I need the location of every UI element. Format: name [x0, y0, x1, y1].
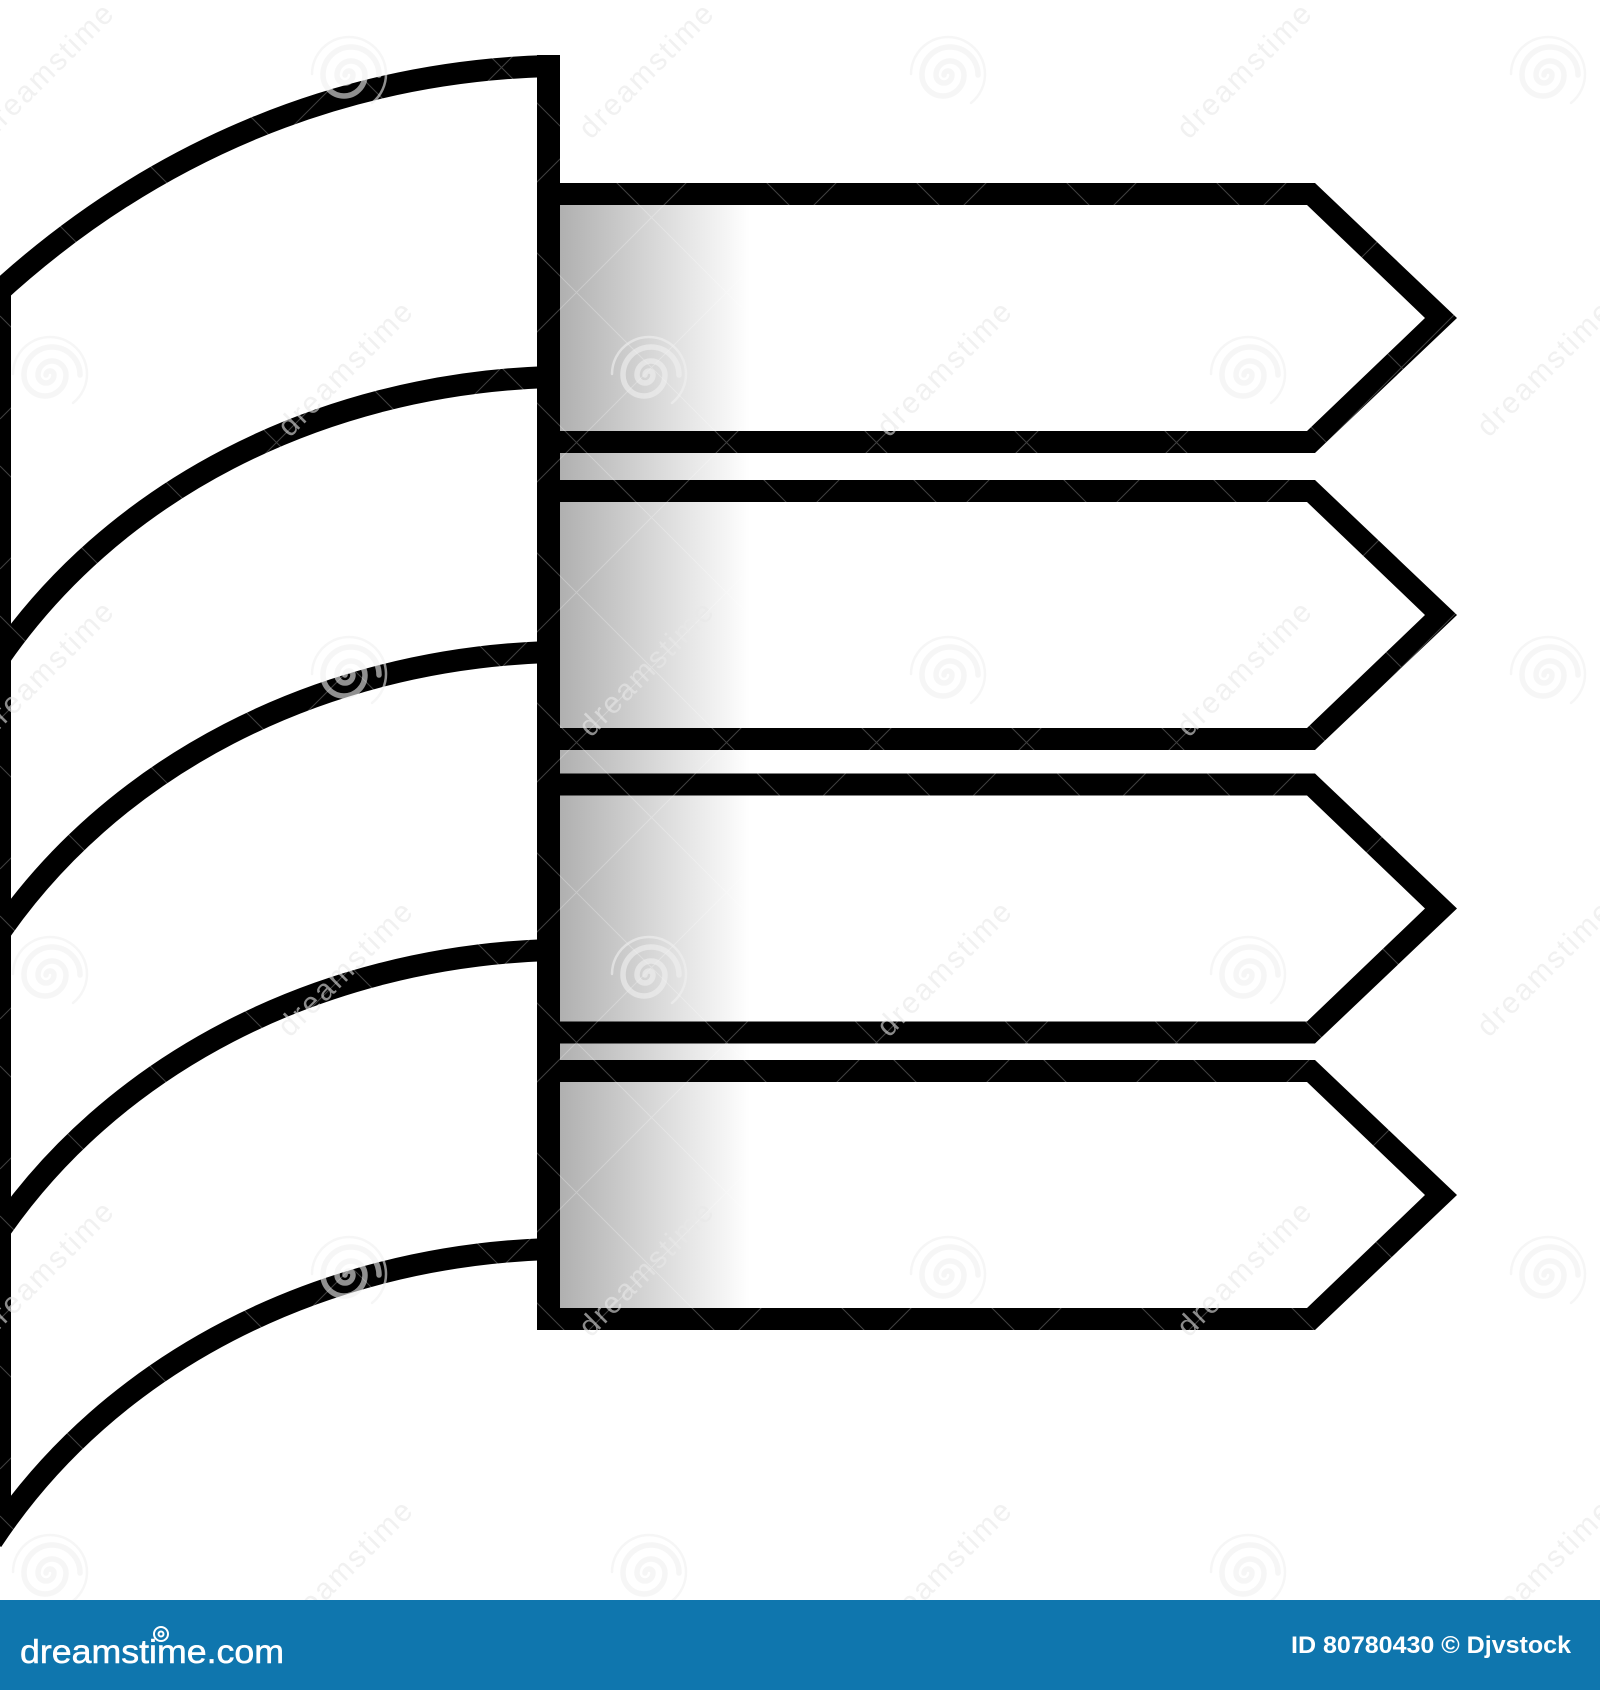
watermark text: dreamstime: [1170, 1195, 1318, 1343]
watermark text: dreamstime: [1170, 595, 1318, 743]
curve 1 (top edge of flag): [0, 66, 548, 296]
watermark text: dreamstime: [870, 895, 1018, 1043]
watermark text: dreamstime: [271, 895, 419, 1043]
watermark text: dreamstime: [271, 1494, 419, 1642]
arrow 4: [560, 1060, 1457, 1330]
flag left edge: [0, 280, 11, 1530]
central vertical post: [537, 55, 560, 1330]
arrow 1: [560, 183, 1457, 453]
watermark text: dreamstime: [572, 0, 720, 145]
curve 3: [0, 652, 548, 944]
curve 5: [0, 1249, 548, 1541]
watermark text: dreamstime: [870, 1494, 1018, 1642]
arrow 2: [560, 480, 1457, 750]
watermark text: dreamstime: [572, 1195, 720, 1343]
footer banner: [0, 1600, 1600, 1690]
arrow 3: [560, 774, 1457, 1044]
panel: curved flag stack: [0, 66, 548, 1541]
image id and credit: ID 80780430 © Djvstock: [1291, 1632, 1572, 1659]
watermark text: dreamstime: [271, 295, 419, 443]
watermark text: dreamstime: [572, 595, 720, 743]
curve 2: [0, 377, 548, 669]
watermark text: dreamstime: [870, 295, 1018, 443]
brand logotype: dreamstime.com: [20, 1633, 284, 1670]
icon: logo spiral: [154, 1627, 168, 1641]
watermark text: dreamstime: [1170, 0, 1318, 145]
curve 4: [0, 950, 548, 1242]
grey gradient strip behind arrows: [560, 205, 750, 1308]
